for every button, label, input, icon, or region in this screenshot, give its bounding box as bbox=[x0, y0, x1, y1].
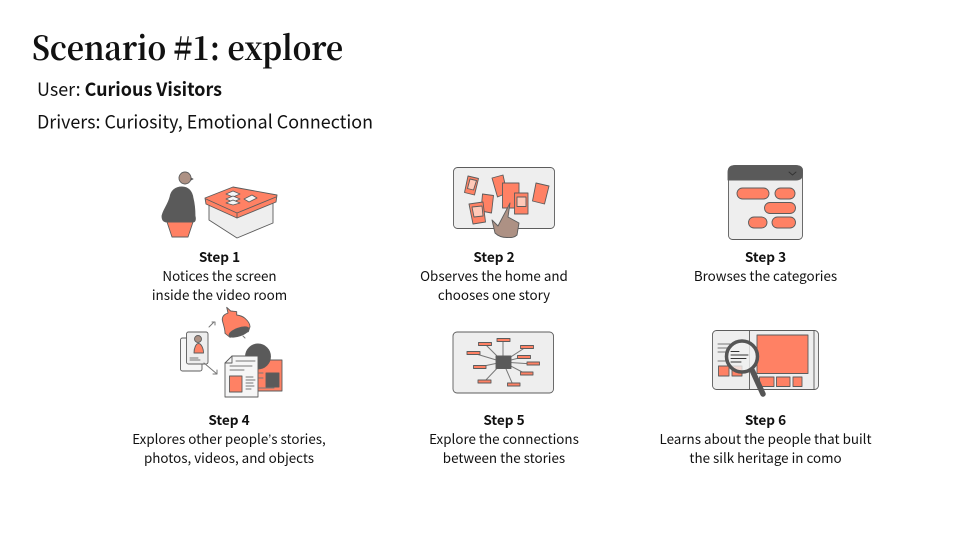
step 3 bbox=[694, 166, 837, 285]
icon: story connections network bbox=[453, 332, 554, 393]
step 4 caption: Step 4 bbox=[208, 409, 250, 429]
step 3 caption: Step 3 bbox=[745, 246, 786, 266]
icon: category browser window bbox=[728, 166, 802, 240]
drivers line: Drivers: Curiosity, Emotional Connection bbox=[37, 108, 373, 134]
step 2 caption bbox=[420, 246, 568, 304]
step 6 caption: Learns about the people that built bbox=[659, 428, 872, 448]
step 1 caption: inside the video room bbox=[152, 284, 287, 304]
user line: User: Curious Visitors bbox=[37, 76, 222, 102]
step 6 caption: the silk heritage in como bbox=[689, 447, 842, 467]
step 4 bbox=[132, 307, 326, 467]
step 2 caption: Observes the home and bbox=[420, 265, 568, 285]
step 5 caption: Step 5 bbox=[483, 409, 525, 429]
step 1 caption: Notices the screen bbox=[162, 265, 277, 285]
step 5 caption: between the stories bbox=[443, 447, 565, 467]
step 5 caption bbox=[429, 409, 579, 467]
step 2 bbox=[420, 168, 568, 304]
step 6 bbox=[659, 330, 872, 467]
icon: magnifier over open book bbox=[712, 330, 818, 394]
step 6 caption bbox=[659, 409, 872, 467]
step 1 caption: Step 1 bbox=[199, 246, 240, 266]
icon: hand choosing a story card bbox=[454, 168, 554, 238]
icon: people cards, object and documents bbox=[180, 307, 282, 397]
step 3 caption bbox=[694, 246, 837, 285]
step 1 bbox=[152, 172, 287, 304]
step 1 caption bbox=[152, 246, 287, 304]
step 4 caption bbox=[132, 409, 326, 467]
title: Scenario #1: explore bbox=[32, 23, 343, 70]
step 6 caption: Step 6 bbox=[745, 409, 786, 429]
icon: visitor looking at screen table bbox=[162, 172, 277, 238]
step 2 caption: chooses one story bbox=[438, 284, 550, 304]
step 2 caption: Step 2 bbox=[473, 246, 515, 266]
step 3 caption: Browses the categories bbox=[694, 265, 837, 285]
step 4 caption: Explores other people’s stories, bbox=[132, 428, 326, 448]
step 4 caption: photos, videos, and objects bbox=[144, 447, 314, 467]
step 5 caption: Explore the connections bbox=[429, 428, 579, 448]
step 5 bbox=[429, 332, 579, 467]
